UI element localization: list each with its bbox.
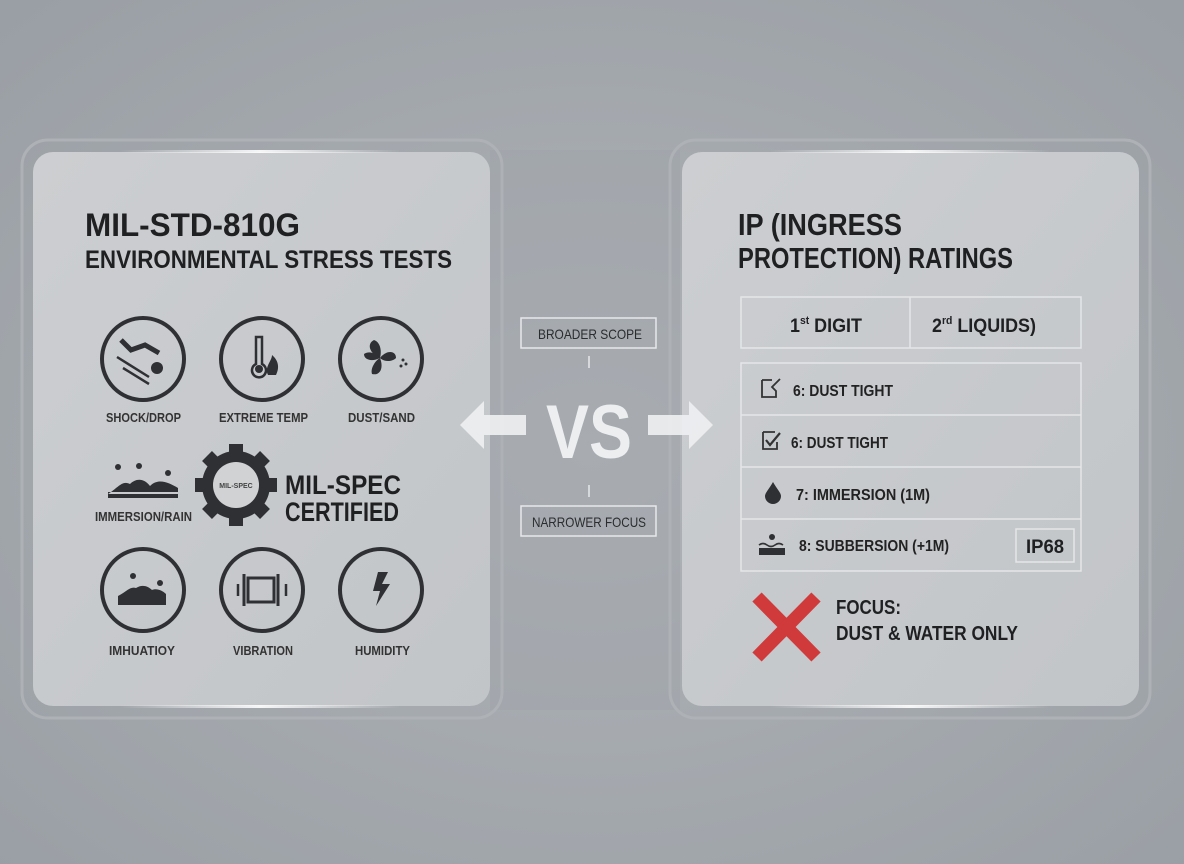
label box: broader scope: BROADER SCOPE xyxy=(538,326,642,342)
title: MIL-STD-810G: MIL-STD-810G xyxy=(85,207,300,243)
icon: immersion/rain waves xyxy=(108,463,178,498)
arrow: left xyxy=(460,401,526,449)
panel: MIL-STD-810G xyxy=(22,140,502,718)
icon: vibration xyxy=(221,549,303,631)
panel: IP ratings xyxy=(670,140,1150,718)
title: MIL-STD-810G xyxy=(85,207,452,274)
label: MIL-SPEC CERTIFIED: MIL-SPEC xyxy=(285,470,401,500)
row: 8 subbersion xyxy=(759,534,949,555)
icon: gear badge xyxy=(195,444,277,526)
table header xyxy=(741,297,1081,348)
label: IMHUATIOY: IMHUATIOY xyxy=(109,643,175,658)
icon: red X xyxy=(757,597,816,657)
icon: shock/drop xyxy=(102,318,184,400)
label box: broader scope xyxy=(521,318,656,348)
table header: rd xyxy=(942,315,952,327)
row: 6 dust tight: 6: DUST TIGHT xyxy=(793,383,893,400)
title: MIL-STD-810G: ENVIRONMENTAL STRESS TESTS xyxy=(85,246,452,274)
icon: gear badge: MIL-SPEC xyxy=(219,483,253,490)
arrow: right xyxy=(648,401,713,449)
row: 7 immersion xyxy=(765,482,930,504)
label: VIBRATION: VIBRATION xyxy=(233,643,293,658)
label: MIL-SPEC CERTIFIED xyxy=(285,470,401,527)
icon: dust/sand fan xyxy=(340,318,422,400)
table header: 2 xyxy=(932,316,943,337)
table rows xyxy=(741,363,1081,571)
row: 6 dust tight check: 6: DUST TIGHT xyxy=(791,435,888,452)
table header: DIGIT xyxy=(809,316,862,337)
title: IP ratings: PROTECTION) RATINGS xyxy=(738,243,1013,275)
text: focus: DUST & WATER ONLY xyxy=(836,623,1019,645)
label: SHOCK/DROP: SHOCK/DROP xyxy=(106,410,181,425)
text: focus xyxy=(836,597,1019,645)
row: 6 dust tight check xyxy=(763,432,888,452)
icon: extreme temp xyxy=(221,318,303,400)
icon: humidity bolt xyxy=(340,549,422,631)
badge: IP68 xyxy=(1016,529,1074,562)
table header: st xyxy=(800,315,810,327)
label: EXTREME TEMP: EXTREME TEMP xyxy=(219,410,308,425)
badge: IP68: IP68 xyxy=(1026,537,1064,558)
label: DUST/SAND: DUST/SAND xyxy=(348,410,415,425)
label: HUMIDITY: HUMIDITY xyxy=(355,643,410,658)
label: MIL-SPEC CERTIFIED: CERTIFIED xyxy=(285,497,399,527)
row: 8 subbersion: 8: SUBBERSION (+1M) xyxy=(799,538,949,555)
row: 7 immersion: 7: IMMERSION (1M) xyxy=(796,487,930,504)
title: IP ratings: IP (INGRESS xyxy=(738,207,902,242)
title: IP ratings xyxy=(738,207,1013,275)
VS: VS xyxy=(546,390,632,475)
icon: immersion (bottom) xyxy=(102,549,184,631)
row: 6 dust tight xyxy=(762,379,893,400)
label: IMMERSION/RAIN: IMMERSION/RAIN xyxy=(95,509,192,524)
text: focus: FOCUS: xyxy=(836,597,901,619)
label box: narrower focus: NARROWER FOCUS xyxy=(532,514,646,530)
table header: LIQUIDS) xyxy=(952,316,1036,337)
table header: 1 xyxy=(790,316,801,337)
label box: narrower focus xyxy=(521,506,656,536)
